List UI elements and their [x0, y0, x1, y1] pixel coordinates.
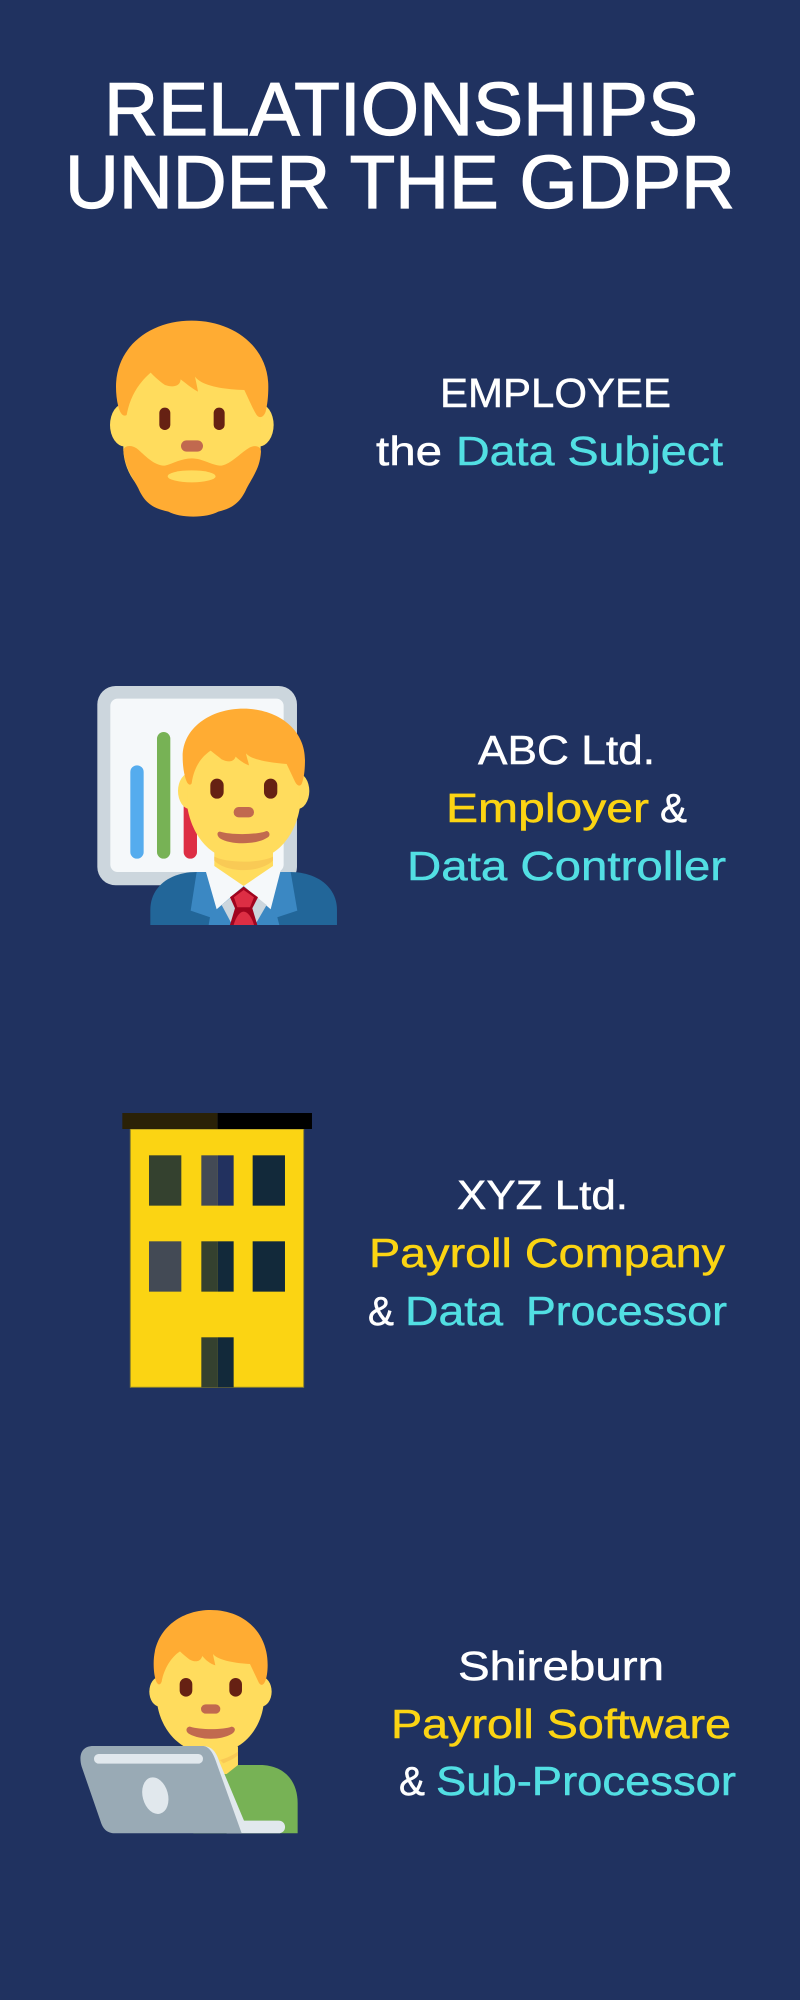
text: payroll company data processor: XYZ Ltd.	[457, 1172, 628, 1218]
text: employer data controller: &	[660, 785, 687, 831]
text: employer data controller: ABC Ltd.	[478, 727, 655, 773]
text: payroll company data processor: &	[368, 1288, 394, 1334]
text: payroll company data processor	[368, 1172, 727, 1334]
text: employer data controller: Employer	[446, 785, 649, 831]
text: employer data controller: Data Controller	[407, 843, 726, 889]
text: payroll company data processor: Data	[405, 1288, 503, 1334]
chart board	[97, 686, 297, 885]
windows and door	[149, 1155, 285, 1387]
title	[65, 67, 735, 224]
title: UNDER THE GDPR	[65, 140, 735, 224]
text: payroll software sub-processor: &	[399, 1758, 425, 1804]
text: payroll software sub-processor	[391, 1643, 736, 1804]
text: payroll company data processor: Processor	[526, 1288, 727, 1334]
icon: man with laptop	[80, 1610, 298, 1833]
icon: office building	[122, 1113, 312, 1387]
laptop	[80, 1746, 285, 1833]
text: payroll company data processor: Payroll Company	[369, 1230, 726, 1276]
icon: bearded employee face	[110, 321, 274, 517]
text: payroll software sub-processor: Shireburn	[458, 1643, 664, 1689]
text: payroll software sub-processor: Sub-Processor	[436, 1758, 736, 1804]
text: employee data subject: EMPLOYEE	[440, 370, 671, 416]
text: employee data subject: the	[376, 428, 442, 474]
text: employer data controller	[407, 727, 726, 889]
man in suit	[150, 709, 337, 925]
text: employee data subject: Data Subject	[456, 428, 724, 474]
icon: employer man with chart board	[97, 686, 337, 925]
text: employee data subject	[376, 370, 724, 474]
text: payroll software sub-processor: Payroll Software	[391, 1701, 731, 1747]
title: RELATIONSHIPS	[104, 67, 698, 151]
